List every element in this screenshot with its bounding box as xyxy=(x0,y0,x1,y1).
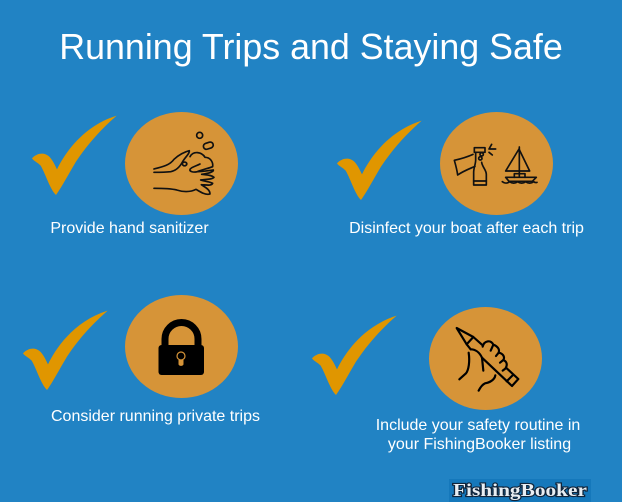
panel: disinfect boat xyxy=(337,112,584,237)
panel: safety routine xyxy=(312,307,580,453)
panel: hand sanitizer xyxy=(32,112,238,237)
label: Provide hand sanitizer xyxy=(50,220,209,237)
icon: check mark 3 xyxy=(23,311,108,390)
label: your FishingBooker listing xyxy=(388,436,571,453)
icon: check mark 1 xyxy=(32,116,117,195)
icon circle: spray and boat xyxy=(440,112,553,215)
icon: check mark 2 xyxy=(337,121,422,200)
label xyxy=(376,417,580,453)
logo: FishingBooker xyxy=(449,479,591,502)
logo: FishingBooker: FishingBooker xyxy=(453,480,587,500)
label: Disinfect your boat after each trip xyxy=(349,220,584,237)
panel: private trips xyxy=(23,295,260,425)
icon circle: padlock xyxy=(125,295,238,398)
label: Consider running private trips xyxy=(51,408,260,425)
icon: check mark 4 xyxy=(312,316,397,395)
icon circle: washing hands xyxy=(125,112,238,215)
title: Running Trips and Staying Safe xyxy=(59,27,563,67)
label: Include your safety routine in xyxy=(376,417,580,434)
icon circle: hand holding pencil xyxy=(429,307,542,410)
